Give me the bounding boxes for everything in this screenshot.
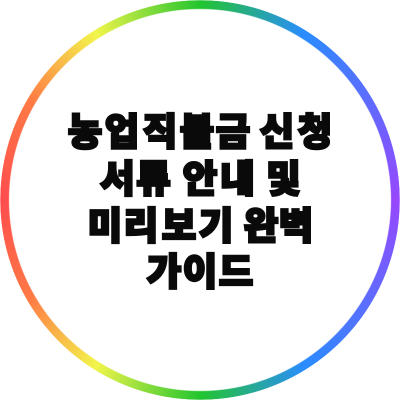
title line 2: 서류 안내 및 bbox=[100, 158, 301, 200]
title line 4: 가이드 bbox=[147, 251, 253, 293]
title line 3: 미리보기 완벽 bbox=[88, 205, 313, 247]
title line 1: 농업직불금 신청 bbox=[68, 111, 332, 153]
